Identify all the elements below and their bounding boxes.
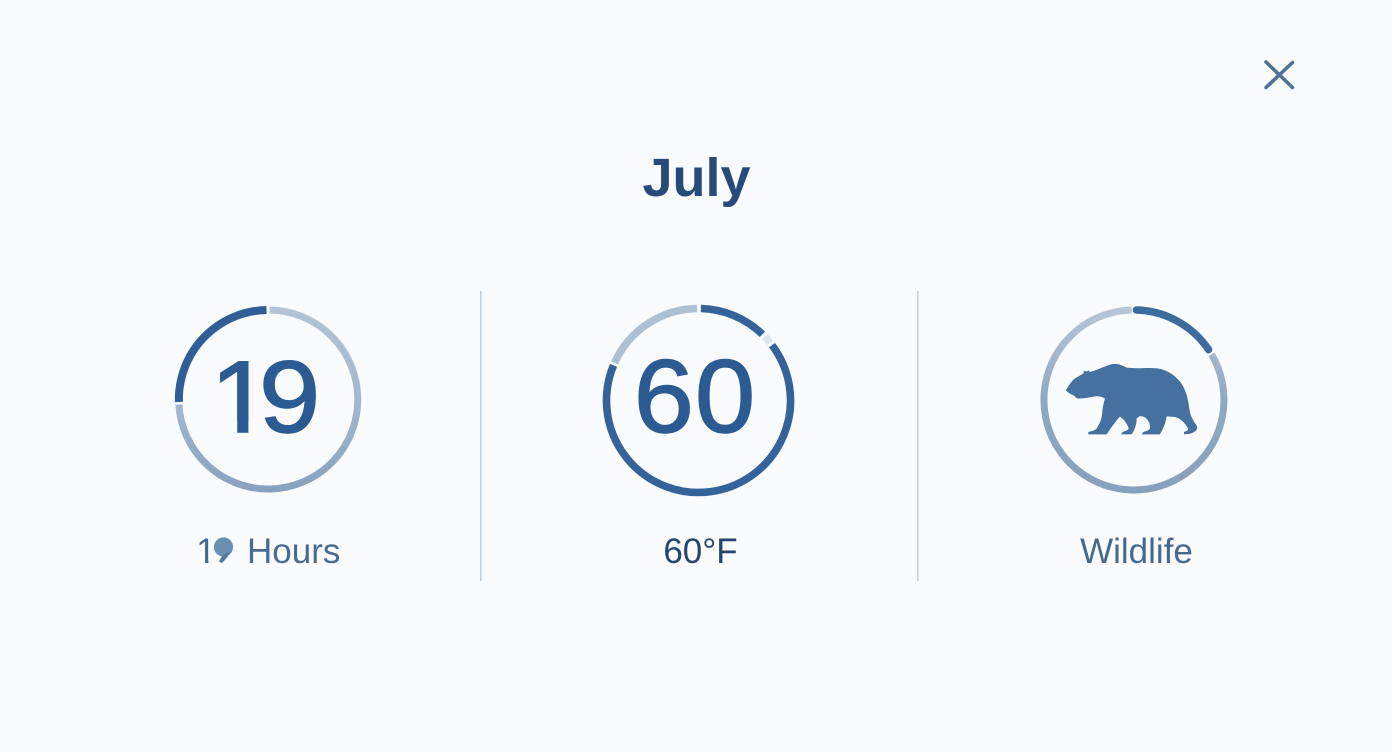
label: 60°F: 60°F [663,532,738,571]
label: 19 hours: 1 [196,532,216,571]
big number: 60: 6 [634,339,694,455]
icon: bear [1066,364,1197,434]
title: July [642,148,751,208]
panel: temperature [607,308,791,571]
divider [480,291,482,581]
big number: 60: 0 [695,339,755,455]
divider [917,291,919,581]
big number: 19 [210,341,320,454]
ring: temperature [607,308,791,492]
label: wildlife: Wildlife [1080,532,1193,571]
icon: pin blob [214,537,233,563]
label: 19 hours: Hours [247,532,340,571]
big number: 19: 9 [259,341,320,454]
panel: daylight hours [179,310,358,571]
ring: wildlife [1044,310,1224,490]
panel: wildlife [1044,310,1224,571]
big number: 19: 1 [210,341,272,454]
label: 19 hours [196,532,340,571]
icon: close [1266,62,1292,88]
label: 19 hours: 9 [218,538,228,558]
ring: hours [179,310,358,489]
